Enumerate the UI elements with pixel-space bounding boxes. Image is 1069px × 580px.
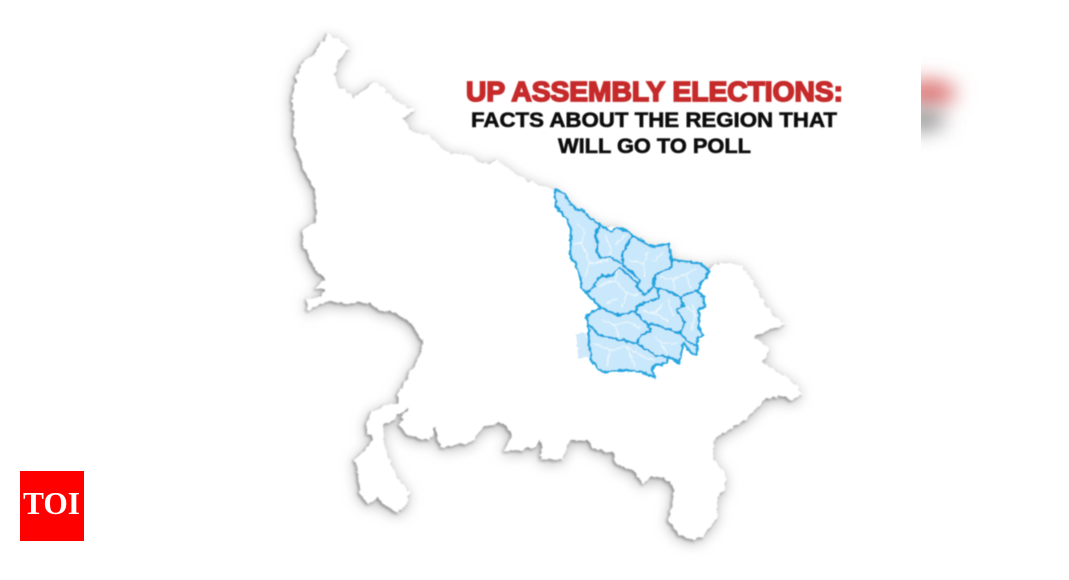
district boundaries [585, 225, 698, 357]
region fill [555, 190, 708, 377]
blurred strip at right edge of artwork [900, 80, 956, 131]
subheading line 1: FACTS ABOUT THE REGION THAT [471, 108, 837, 132]
heading: red headline: UP ASSEMBLY ELECTIONS: [466, 76, 843, 107]
map: highlighted region going to poll [555, 190, 708, 377]
light patch outside the outlined region [576, 333, 590, 358]
map: Uttar Pradesh outline [292, 33, 802, 540]
constituency boundaries [573, 223, 697, 367]
TOI logo [20, 471, 84, 541]
TOI logo: TOI [23, 485, 80, 521]
subheading line 2: WILL GO TO POLL [558, 134, 751, 158]
title [466, 76, 843, 158]
